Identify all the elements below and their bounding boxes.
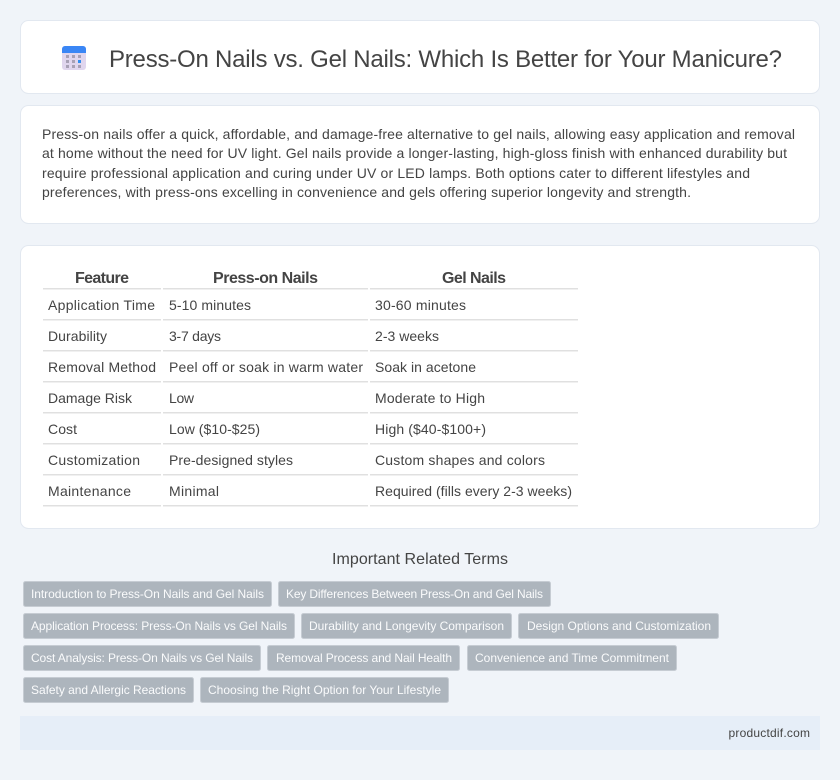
table header — [75, 270, 506, 287]
panel: header — [20, 20, 820, 94]
tag: Cost Analysis: Press-On Nails vs Gel Nails — [31, 651, 253, 665]
tag: Design Options and Customization — [527, 619, 711, 633]
table row: removal method — [48, 359, 476, 375]
tag: Convenience and Time Commitment — [475, 651, 670, 665]
table row: customization: Customization — [48, 452, 140, 468]
tag — [200, 678, 448, 702]
table row: maintenance: Maintenance — [48, 483, 131, 499]
footer — [20, 716, 820, 750]
table row: removal method: Removal Method — [48, 359, 156, 375]
tag — [24, 614, 294, 638]
footer: productdif.com — [728, 726, 810, 740]
text block: introduction: Press-on nails offer a quick, affordable, and damage-free alternative to gel nails, allowing easy application and removal — [42, 126, 795, 142]
table header: Feature — [75, 270, 129, 287]
tag: Removal Process and Nail Health — [276, 651, 452, 665]
text block: introduction: require professional application and curing under UV or LED lamps. Both options cater to different lifestyles and — [42, 165, 750, 181]
tag — [278, 582, 550, 606]
table row: cost — [48, 421, 486, 437]
text block: introduction — [42, 126, 795, 200]
table row: application time: 5-10 minutes — [169, 297, 251, 313]
table row: removal method: Peel off or soak in warm water — [169, 359, 363, 375]
table row: durability: 2-3 weeks — [375, 328, 439, 344]
tag: Choosing the Right Option for Your Lifestyle — [208, 683, 441, 697]
tag — [24, 646, 260, 670]
table row: application time — [48, 297, 466, 313]
table row: application time: Application Time — [48, 297, 155, 313]
table row: cost: Low ($10-$25) — [169, 421, 260, 437]
table row: damage risk: Damage Risk — [48, 390, 133, 406]
table row: maintenance — [48, 483, 572, 499]
tag — [268, 646, 460, 670]
tag — [24, 678, 194, 702]
table row: durability — [48, 328, 439, 344]
table row: maintenance: Required (fills every 2-3 weeks) — [375, 483, 572, 499]
table row: cost: High ($40-$100+) — [375, 421, 486, 437]
table header: Press-on Nails — [213, 270, 318, 287]
table row: damage risk — [48, 390, 485, 406]
heading: related terms: Important Related Terms — [332, 551, 508, 568]
table row: maintenance: Minimal — [169, 483, 219, 499]
related terms tags — [24, 582, 718, 702]
tag — [518, 614, 718, 638]
tag: Key Differences Between Press-On and Gel Nails — [286, 587, 543, 601]
table row: customization — [48, 452, 545, 468]
text block: introduction: preferences, with press-ons excelling in convenience and gels offering superior longevity and strength. — [42, 184, 691, 200]
table row: cost: Cost — [48, 421, 77, 437]
table header: Gel Nails — [442, 270, 506, 287]
title: Press-On Nails vs. Gel Nails: Which Is Better for Your Manicure? — [109, 46, 782, 73]
tag: Durability and Longevity Comparison — [309, 619, 504, 633]
table row: application time: 30-60 minutes — [375, 297, 466, 313]
table row: customization: Custom shapes and colors — [375, 452, 545, 468]
panel: introduction — [20, 106, 820, 224]
table row: damage risk: Moderate to High — [375, 390, 485, 406]
table row: damage risk: Low — [169, 390, 195, 406]
text block: introduction: at home without the need for UV light. Gel nails provide a longer-lasting, high-gloss finish with enhanced durability but — [42, 145, 787, 161]
table row: removal method: Soak in acetone — [375, 359, 476, 375]
tag — [24, 582, 272, 606]
panel: comparison table — [20, 246, 820, 528]
tag — [468, 646, 676, 670]
tag: Safety and Allergic Reactions — [31, 683, 186, 697]
tag: Application Process: Press-On Nails vs Gel Nails — [31, 619, 287, 633]
table row: durability: 3-7 days — [169, 328, 221, 344]
table row: durability: Durability — [48, 328, 107, 344]
table row: customization: Pre-designed styles — [169, 452, 293, 468]
icon: calendar — [62, 46, 86, 70]
tag — [302, 614, 512, 638]
tag: Introduction to Press-On Nails and Gel Nails — [31, 587, 264, 601]
